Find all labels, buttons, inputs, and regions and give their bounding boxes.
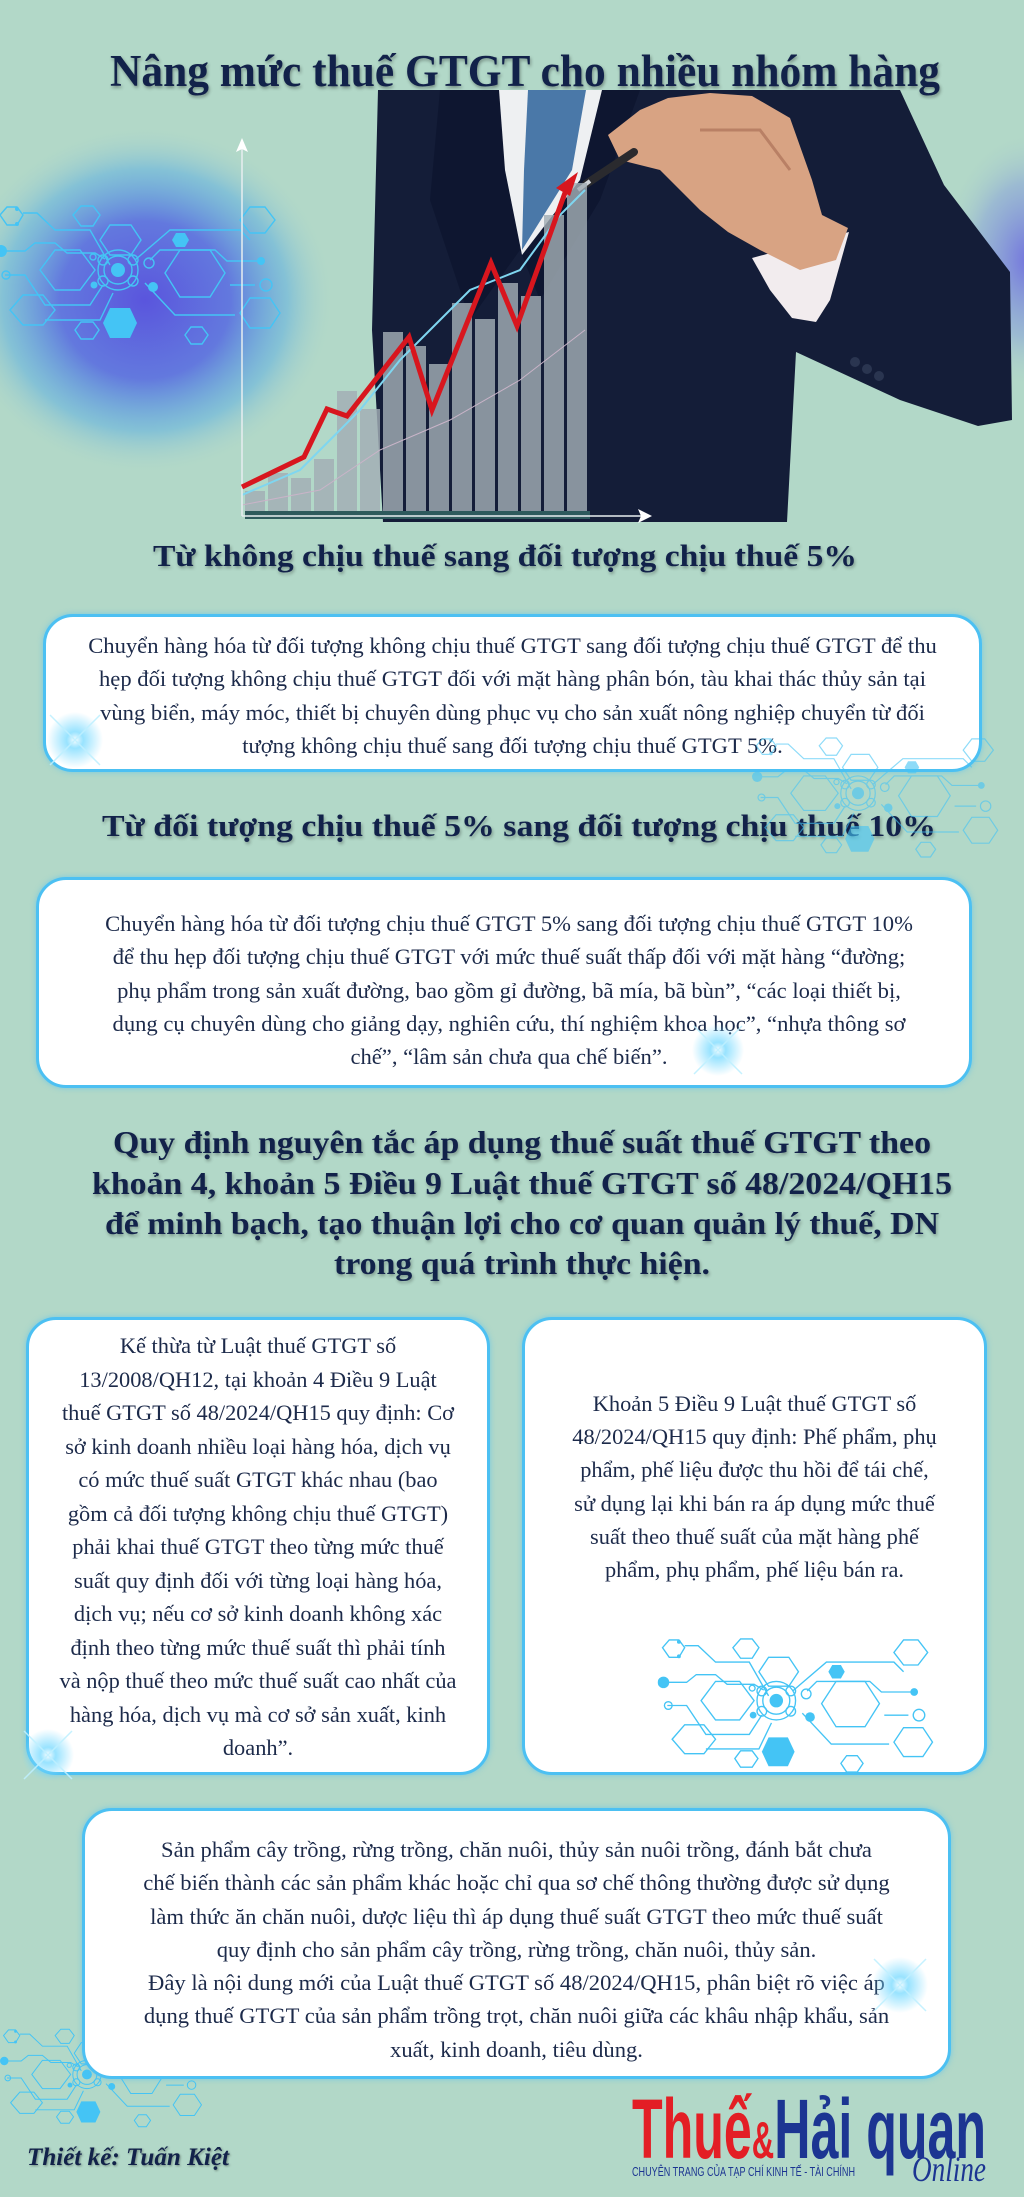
red growth line <box>242 190 566 487</box>
text block: bottom box <box>143 1837 890 2062</box>
text block: box 2: để thu hẹp đối tượng chịu thuế GTGT với mức thuế suất thấp đối với mặt hàng “đường; <box>113 944 905 969</box>
text block: box 1: vùng biển, máy móc, thiết bị chuyên dùng phục vụ cho sản xuất nông nghiệp chuyển từ đối <box>100 700 925 725</box>
text block: box 2: Chuyển hàng hóa từ đối tượng chịu thuế GTGT 5% sang đối tượng chịu thuế GTGT 10% <box>105 911 913 936</box>
text block: right box: Khoản 5 Điều 9 Luật thuế GTGT số <box>593 1391 916 1416</box>
pen <box>586 152 634 184</box>
logo: Thuế & Hải quan Online: Online <box>912 2149 986 2189</box>
text block: box 1: hẹp đối tượng không chịu thuế GTGT đối với mặt hàng phân bón, tàu khai thác thủy sản tại <box>99 666 926 691</box>
hand <box>608 93 848 270</box>
heading: section 3 (4 lines) <box>92 1124 954 1285</box>
shirt <box>499 90 602 255</box>
cuff <box>752 232 849 322</box>
panel: box 1 <box>43 614 982 772</box>
text block: box 1 <box>88 633 937 758</box>
panel: left box (khoản 4) <box>26 1317 490 1775</box>
text block: bottom box: Sản phẩm cây trồng, rừng trồng, chăn nuôi, thủy sản nuôi trồng, đánh bắt chưa <box>161 1837 872 1862</box>
heading: section 3 (4 lines): để minh bạch, tạo thuận lợi cho cơ quan quản lý thuế, DN <box>105 1205 939 1241</box>
title: Nâng mức thuế GTGT cho nhiều nhóm hàng <box>110 46 940 96</box>
text block: left box: Kế thừa từ Luật thuế GTGT số <box>120 1333 396 1358</box>
text block: left box <box>60 1333 456 1760</box>
text block: right box: 48/2024/QH15 quy định: Phế phẩm, phụ <box>572 1424 937 1449</box>
text block: left box: phải khai thuế GTGT theo từng mức thuế <box>72 1534 444 1559</box>
text block: left box: doanh”. <box>223 1735 293 1760</box>
icon: hex circuit overlay near heading 2 <box>752 737 998 858</box>
panel: bottom box <box>82 1808 951 2079</box>
heading: section 3 (4 lines): khoản 4, khoản 5 Điều 9 Luật thuế GTGT số 48/2024/QH15 <box>92 1165 952 1201</box>
text block: left box: định theo từng mức thuế suất thì phải tính <box>70 1634 446 1660</box>
panel: right box (khoản 5) <box>522 1317 987 1775</box>
text block: box 2: chế”, “lâm sản chưa qua chế biến”. <box>350 1044 668 1069</box>
heading: section 3 (4 lines): Quy định nguyên tắc áp dụng thuế suất thuế GTGT theo <box>113 1124 931 1160</box>
text block: right box: suất theo thuế suất của mặt hàng phế <box>590 1524 919 1549</box>
jacket <box>372 90 1012 522</box>
text block: bottom box: dụng thuế GTGT của sản phẩm trồng trọt, chăn nuôi giữa các khâu nhập khẩu, sản <box>144 2003 889 2028</box>
text block: right box <box>572 1391 937 1582</box>
text block: left box: thuế GTGT số 48/2024/QH15 quy định: Cơ <box>62 1400 454 1425</box>
text block: bottom box: làm thức ăn chăn nuôi, dược liệu thì áp dụng thuế suất GTGT theo mức thuế suất <box>150 1904 883 1929</box>
text block: right box: phẩm, phụ phẩm, phế liệu bán ra. <box>605 1557 904 1582</box>
icon: hex circuit in right box <box>658 1638 934 1772</box>
heading: section 3 (4 lines): trong quá trình thực hiện. <box>334 1245 710 1281</box>
text block: box 1: Chuyển hàng hóa từ đối tượng không chịu thuế GTGT sang đối tượng chịu thuế GTGT để thu <box>88 633 937 658</box>
text block: box 1: tượng không chịu thuế sang đối tượng chịu thuế GTGT 5%. <box>242 733 783 758</box>
text block: left box: có mức thuế suất GTGT khác nhau (bao <box>78 1467 438 1492</box>
bars <box>245 183 587 511</box>
text block: left box: hàng hóa, dịch vụ mà cơ sở sản xuất, kinh <box>70 1702 446 1726</box>
text block: box 2 <box>105 911 913 1069</box>
designer credit: Thiết kế: Tuấn Kiệt <box>27 2144 230 2171</box>
text block: bottom box: quy định cho sản phẩm cây trồng, rừng trồng, chăn nuôi, thủy sản. <box>217 1937 816 1962</box>
tie <box>522 90 586 250</box>
text block: left box: dịch vụ; nếu cơ sở kinh doanh không xác <box>74 1601 442 1626</box>
heading: section 2: Từ đối tượng chịu thuế 5% sang đối tượng chịu thuế 10% <box>102 808 936 843</box>
logo: Thuế & Hải quan Online: CHUYÊN TRANG CỦA TẠP CHÍ KINH TẾ - TÀI CHÍNH <box>632 2164 855 2179</box>
text block: right box: phẩm, phế liệu được thu hồi để tái chế, <box>580 1457 929 1482</box>
text block: right box: sử dụng lại khi bán ra áp dụng mức thuế <box>574 1491 935 1516</box>
text block: left box: 13/2008/QH12, tại khoản 4 Điều 9 Luật <box>79 1366 437 1392</box>
text block: bottom box: chế biến thành các sản phẩm khác hoặc chỉ qua sơ chế thông thường được sử dụng <box>143 1870 890 1895</box>
panel: box 2 <box>36 877 972 1088</box>
text block: left box: suất quy định đối với từng loại hàng hóa, <box>74 1568 442 1592</box>
text block: box 2: phụ phẩm trong sản xuất đường, bao gồm gỉ đường, bã mía, bã bùn”, “các loại thiết bị, <box>117 978 901 1003</box>
text block: left box: và nộp thuế theo mức thuế suất cao nhất của <box>60 1668 456 1693</box>
text block: left box: gồm cả đối tượng không chịu thuế GTGT) <box>68 1500 448 1526</box>
text block: bottom box: Đây là nội dung mới của Luật thuế GTGT số 48/2024/QH15, phân biệt rõ việc áp <box>148 1970 885 1995</box>
axes <box>241 145 243 516</box>
text block: box 2: dụng cụ chuyên dùng cho giảng dạy, nghiên cứu, thí nghiệm khoa học”, “nhựa thông sơ <box>113 1011 905 1036</box>
text block: left box: sở kinh doanh nhiều loại hàng hóa, dịch vụ <box>65 1434 451 1458</box>
heading: section 1: Từ không chịu thuế sang đối tượng chịu thuế 5% <box>153 538 857 573</box>
text block: bottom box: xuất, kinh doanh, tiêu dùng. <box>390 2037 643 2062</box>
hero image: businessman drawing growth chart <box>236 90 1012 523</box>
